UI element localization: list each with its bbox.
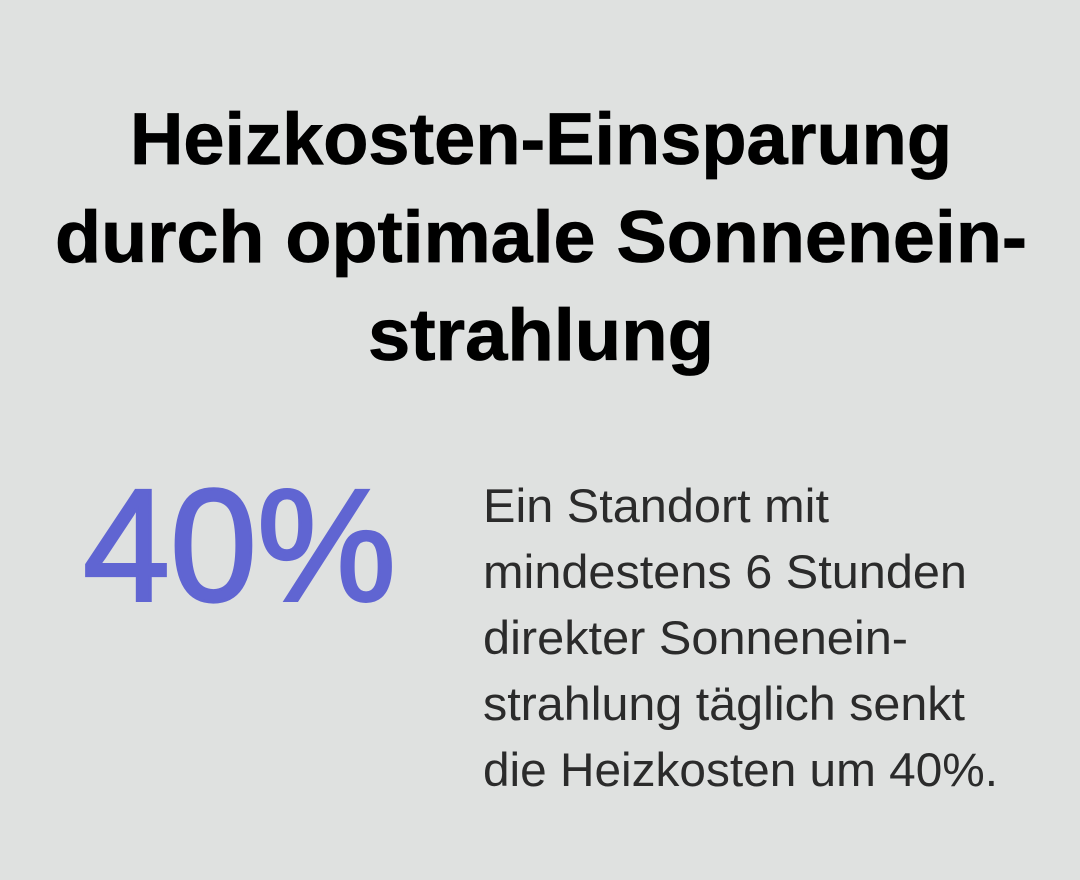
description text: strahlung täglich senkt (483, 677, 965, 730)
description text: mindestens 6 Stunden (483, 545, 967, 598)
title: Heizkosten-Einsparung (130, 99, 952, 180)
title: strahlung (368, 295, 714, 376)
description text: direkter Sonnenein- (483, 611, 908, 664)
title (55, 99, 1027, 376)
description text (483, 479, 998, 796)
title: durch optimale Sonnenein- (55, 197, 1027, 278)
description text: die Heizkosten um 40%. (483, 743, 998, 796)
description text: Ein Standort mit (483, 479, 829, 532)
big statistic: 40%: 40% (83, 456, 396, 634)
